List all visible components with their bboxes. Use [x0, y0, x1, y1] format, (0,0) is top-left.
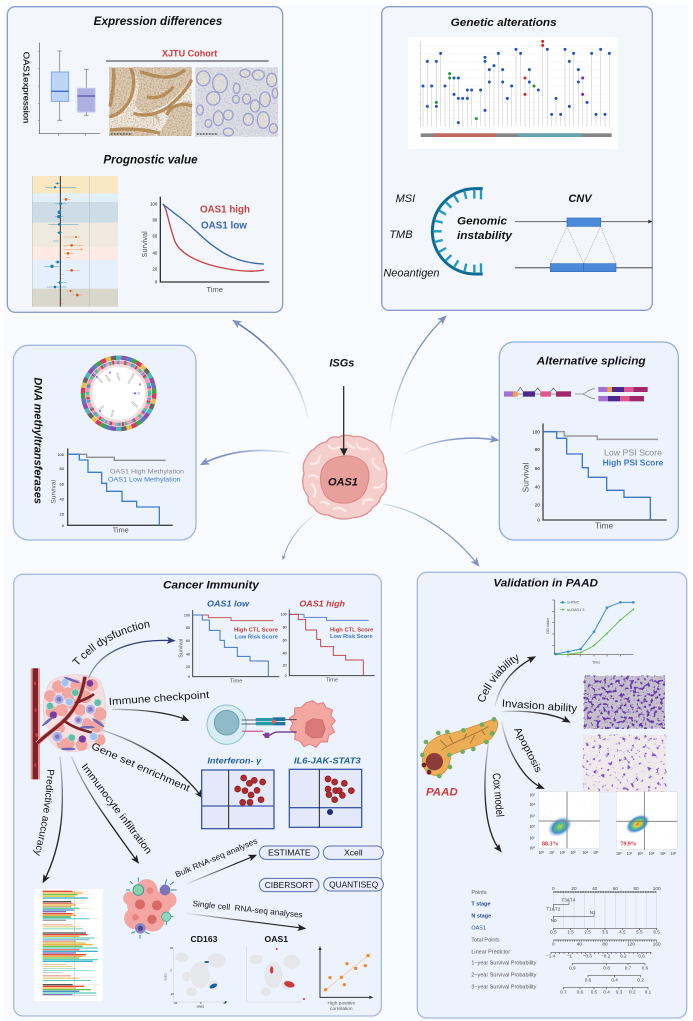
nomogram tick labels: 0.4 [611, 977, 618, 982]
heading: Genetic alterations: Genetic alterations [451, 17, 557, 29]
nomogram tick labels: −1.4 [546, 954, 556, 959]
flow cytometry: group 2: 10² [637, 851, 643, 856]
line chart: cell viability: Time [592, 661, 600, 665]
flow cytometry: group 1: 10⁵ [529, 793, 535, 798]
nomogram tick labels: 0.7 [625, 965, 632, 970]
flow cytometry: group 1: 10⁰ [529, 845, 535, 850]
central OAS1 cell [303, 357, 387, 519]
survival chart: PSI score: 80 [535, 447, 540, 452]
flow cytometry: group 1: 10³ [529, 813, 535, 818]
tSNE plot: CD163: tSNE1 [197, 1005, 205, 1009]
nomogram [471, 886, 661, 994]
method pills [259, 846, 383, 892]
arrow and label: Predictive accuracy [33, 756, 63, 884]
arrow and label: Cox model: Cox model [490, 773, 505, 817]
survival chart: methylation: OAS1 Low Methylation [108, 477, 181, 484]
nomogram row labels: T stage [471, 902, 491, 908]
labels: MSI, TMB, Neoantigen [383, 193, 440, 280]
survival chart: PSI score [521, 423, 667, 530]
flow cytometry: group 2 [616, 792, 677, 856]
survival chart: OAS1 low: 20 [186, 665, 190, 669]
label: Genomic instability: Genomic [457, 216, 507, 228]
survival chart: OAS1 low: Low Risk Score [235, 635, 278, 641]
nomogram tick labels: 120 [627, 942, 635, 947]
survival chart: OAS1 high vs low: Survival [140, 231, 149, 257]
label: Genomic instability: instability [457, 230, 513, 242]
arrow and label: Cell viability [478, 654, 536, 706]
image: transwell invasion, knockdown [583, 735, 666, 793]
survival chart: OAS1 high: 80 [283, 625, 287, 629]
nomogram row labels: Linear Predictor [471, 949, 510, 955]
nomogram tick labels: 4.5 [619, 930, 626, 935]
survival chart: OAS1 high vs low: OAS1 high [200, 205, 250, 216]
nomogram tick labels: 0.6 [585, 977, 592, 982]
arrow: OAS1 to genetic alterations [390, 317, 445, 432]
panel: cancer immunity [13, 574, 384, 1017]
tSNE plot: CD163: 0 [200, 1001, 202, 1005]
survival chart: OAS1 low [179, 598, 279, 685]
flow cytometry: group 1: 10¹ [529, 835, 535, 840]
tSNE plot: CD163: 0 [170, 969, 172, 973]
survival chart: OAS1 high vs low: 0 [155, 280, 158, 285]
survival chart: OAS1 low: 80 [186, 626, 190, 630]
arrow and label: Gene set enrichment: Gene set enrichment [89, 741, 192, 795]
line chart: cell viability: OD Value [546, 618, 550, 634]
image: IHC low staining [195, 67, 278, 137]
method pills: Xcell [344, 848, 363, 858]
survival chart: PSI score: 100 [532, 429, 540, 434]
flow cytometry: group 2: 10⁴ [660, 851, 666, 856]
illustration: tumor with blood vessel [31, 668, 106, 779]
arrow and label: Apoptosis: Apoptosis [511, 726, 544, 775]
arrow and label: Gene set enrichment [89, 729, 202, 797]
arrow: OAS1 to expression panel [234, 321, 308, 418]
survival chart: methylation: 60 [60, 481, 65, 486]
tSNE plot: OAS1: OAS1 [265, 934, 288, 944]
illustration: pancreas [420, 717, 498, 778]
arrow and label: Immunocyte infiltration [72, 757, 154, 862]
arrow and label: Immune checkpoint: Immune checkpoint [108, 690, 210, 708]
arrow and label: Cell viability: Cell viability [478, 654, 518, 702]
survival chart: OAS1 high: Low Risk Score [330, 634, 373, 640]
nomogram tick labels: 1.5 [567, 930, 574, 935]
nomogram row labels: N stage [471, 914, 491, 920]
survival chart: PSI score: High PSI Score [603, 458, 664, 468]
flow cytometry: group 1: 10⁴ [582, 850, 588, 855]
nomogram tick labels: 0.6 [638, 954, 645, 959]
flow cytometry: group 2: 10⁰ [616, 851, 622, 856]
label: XJTU Cohort: XJTU Cohort [162, 48, 217, 58]
nomogram tick labels: 6.5 [653, 930, 660, 935]
icon: genomic instability DNA arc [432, 189, 483, 274]
survival chart: OAS1 high vs low: Time [206, 285, 223, 294]
tSNE plot: CD163: 20 [170, 946, 173, 950]
nomogram row labels: OAS1 [471, 926, 486, 932]
survival chart: methylation: 40 [60, 497, 65, 502]
nomogram tick labels: 0.6 [642, 965, 649, 970]
heading: Alternative splicing: Alternative splicing [536, 356, 646, 368]
illustration: immune checkpoint interaction [207, 701, 335, 747]
survival chart: OAS1 high: 20 [283, 664, 287, 668]
survival chart: OAS1 low: 60 [186, 639, 190, 643]
tSNE plot: CD163: -20 [173, 1001, 178, 1005]
line chart: cell viability: si-RNC [567, 601, 580, 605]
flow cytometry: group 1: 10⁰ [538, 850, 544, 855]
image: transwell invasion, control [584, 676, 665, 729]
survival chart: methylation [50, 448, 184, 535]
tSNE plot: CD163: tSNE2 [164, 973, 168, 981]
nomogram tick labels: 0 [552, 886, 555, 891]
survival chart: methylation: 80 [60, 466, 65, 471]
flow cytometry: group 2: 79.9% [620, 842, 637, 848]
diagram: splicing transcripts [504, 387, 648, 401]
nomogram tick labels: 0.2 [637, 977, 644, 982]
panel: validation in PAAD [416, 572, 688, 1019]
nomogram tick labels: 80 [602, 942, 608, 947]
survival chart: PSI score: Low PSI Score [604, 448, 662, 458]
heading: Cancer Immunity: Cancer Immunity [163, 580, 260, 592]
flow cytometry: group 2: 10³ [649, 851, 655, 856]
survival chart: methylation: 100 [57, 452, 65, 457]
survival chart: OAS1 high: 60 [283, 638, 287, 642]
survival chart: OAS1 high: Time [326, 678, 338, 684]
arrow and label: Immune checkpoint [108, 690, 210, 720]
line chart: cell viability [546, 600, 635, 665]
arrow and label: Bulk RNA-seq analyses: Bulk RNA-seq analyses [174, 836, 259, 879]
survival chart: PSI score: 60 [535, 466, 540, 471]
survival chart: OAS1 high: OAS1 high [299, 598, 345, 608]
flow cytometry: group 1: 10¹ [549, 850, 555, 855]
survival chart: OAS1 low: Survival [179, 639, 185, 658]
survival chart: OAS1 high vs low: 100 [150, 202, 158, 207]
arrow and label: Single cell RNA-seq analyses: Single cell RNA-seq analyses [192, 899, 303, 920]
survival chart: OAS1 low: 40 [186, 652, 190, 656]
nomogram tick labels: 20 [571, 886, 577, 891]
nomogram tick labels: 5.5 [636, 930, 643, 935]
arrow and label: Cox model [485, 737, 505, 851]
arrow and label: Immunocyte infiltration: Immunocyte infiltration [79, 762, 154, 856]
nomogram tick labels: 2.5 [584, 930, 591, 935]
arrow: OAS1 to PAAD validation [383, 504, 478, 565]
enrichment plot: IL6-JAK-STAT3: IL6-JAK-STAT3 [294, 755, 361, 765]
panel: DNA methyltransferases [13, 345, 196, 540]
tSNE plot: CD163: -20 [170, 992, 174, 996]
arrow and label: Invasion ability: Invasion ability [501, 698, 578, 715]
arrow and label: Single cell RNA-seq analyses [186, 899, 304, 928]
tSNE plot: OAS1 [247, 934, 305, 1002]
nomogram tick labels: 100 [653, 886, 661, 891]
survival chart: OAS1 low: Time [230, 679, 242, 685]
scatter plot: correlation [318, 946, 373, 1012]
labels: MSI, TMB, Neoantigen: MSI [396, 193, 415, 205]
nomogram tick labels: T1&T2 [546, 906, 561, 911]
nomogram tick labels: 0.9 [569, 965, 576, 970]
survival chart: OAS1 high vs low: OAS1 low [201, 221, 247, 232]
flow cytometry: group 1: 10⁵ [593, 850, 599, 855]
lollipop mutation chart [408, 37, 618, 149]
nomogram tick labels: −0.2 [601, 954, 611, 959]
survival chart: PSI score: Survival [521, 463, 531, 492]
heading: DNA methyltransferases: DNA methyltransferases [31, 377, 43, 504]
nomogram tick labels: 80 [633, 886, 639, 891]
survival chart: OAS1 high vs low: 80 [153, 217, 158, 222]
nomogram row labels: Points [471, 890, 487, 896]
survival chart: OAS1 high vs low: 60 [153, 234, 158, 239]
nomogram tick labels: 0.5 [550, 930, 557, 935]
flow cytometry: group 2: 10¹ [627, 851, 633, 856]
flow cytometry: group 1: 88.3% [542, 841, 558, 847]
tSNE plot: CD163 [164, 934, 230, 1009]
diagram: copy number variation [515, 218, 652, 272]
arrow: ISGs to OAS1 [340, 386, 348, 456]
label: CNV: CNV [568, 193, 593, 205]
label: ISGs: ISGs [329, 357, 354, 369]
nomogram tick labels: 0 [552, 942, 555, 947]
survival chart: OAS1 low: High CTL Score [234, 627, 278, 633]
arrow and label: T cell dysfunction [72, 622, 176, 679]
heading: Expression differences: Expression differences [94, 14, 223, 28]
enrichment plot: IL6-JAK-STAT3 [289, 755, 362, 827]
panel: alternative splicing [499, 342, 678, 540]
survival chart: OAS1 high: 40 [283, 652, 287, 656]
survival chart: PSI score: 40 [535, 485, 540, 490]
flow cytometry: group 1: 10² [529, 824, 535, 829]
nomogram tick labels: 0.3 [616, 989, 623, 994]
flow cytometry: group 1 [529, 792, 600, 855]
arrow: OAS1 to DNA methyltransferases [202, 451, 290, 464]
survival chart: OAS1 high: 100 [281, 613, 287, 617]
nomogram tick labels: −0.6 [583, 954, 592, 959]
survival chart: OAS1 high vs low [140, 197, 269, 294]
arrow: OAS1 to alternative splicing [403, 438, 497, 455]
label: PAAD: PAAD [426, 787, 458, 799]
illustration: immune-infiltrated tumor [123, 877, 177, 939]
survival chart: PSI score: 20 [535, 503, 540, 508]
nomogram tick labels: 0.2 [629, 989, 636, 994]
forest plot [32, 176, 118, 307]
nomogram row labels: 2−year Survival Probability [471, 973, 537, 979]
tSNE plot: CD163: CD163 [191, 934, 218, 944]
nomogram axes [551, 892, 657, 989]
method pills: ESTIMATE [268, 848, 311, 858]
survival chart: OAS1 low: 100 [184, 613, 190, 617]
image: IHC high staining [109, 67, 192, 136]
nomogram row labels [471, 890, 537, 991]
nomogram tick labels: T3&T4 [561, 898, 576, 903]
method pills: CIBERSORT [265, 880, 313, 890]
nomogram tick labels: 0.8 [603, 965, 610, 970]
nomogram tick labels: 0.1 [645, 989, 652, 994]
arrow and label: T cell dysfunction: T cell dysfunction [72, 622, 150, 664]
nomogram tick labels: 40 [577, 942, 582, 947]
nomogram tick labels: 60 [613, 886, 618, 891]
nomogram tick labels: N1 [590, 910, 596, 915]
label: OAS1: OAS1 [328, 477, 358, 489]
survival chart: OAS1 high: High CTL Score [330, 627, 373, 633]
method pills: QUANTISEQ [329, 879, 379, 889]
label: Genomic instability [457, 216, 513, 242]
heading: Validation in PAAD: Validation in PAAD [493, 578, 598, 590]
survival chart: PSI score: 0 [537, 518, 540, 523]
nomogram tick labels: 0.6 [577, 989, 584, 994]
survival chart: OAS1 high: 0 [285, 674, 287, 678]
survival chart: methylation: Survival [50, 479, 57, 504]
survival chart: OAS1 high [281, 598, 375, 684]
icon: tumor cell [303, 435, 387, 519]
nomogram tick labels [546, 886, 661, 994]
nomogram tick labels: 0.2 [620, 954, 627, 959]
flow cytometry: group 2: 10⁵ [671, 851, 677, 856]
survival chart: methylation: Time [113, 526, 129, 535]
nomogram tick labels: 0.7 [560, 989, 567, 994]
scatter plot: correlation: correlation [330, 1006, 353, 1012]
nomogram tick labels: 3.5 [602, 930, 609, 935]
arrow: OAS1 to cancer immunity [283, 513, 317, 559]
nomogram row labels: 3−year Survival Probability [471, 985, 537, 991]
survival chart: methylation: 0 [62, 523, 65, 528]
arrow and label: Invasion ability [501, 698, 578, 722]
line chart: cell viability: si-OAS1 3 [567, 608, 584, 612]
boxplot: OAS1 expression: OAS1expression [21, 52, 31, 124]
survival chart: OAS1 low: 0 [188, 675, 190, 679]
nomogram row labels: 1−year Survival Probability [471, 961, 537, 967]
survival chart: OAS1 high vs low: 40 [153, 251, 158, 256]
nomogram tick labels: N0 [551, 918, 557, 923]
labels: MSI, TMB, Neoantigen: Neoantigen [383, 268, 440, 280]
nomogram tick labels: 0.5 [591, 989, 598, 994]
flow cytometry: group 1: 10⁴ [529, 802, 535, 807]
flow cytometry: group 1: 10² [560, 850, 566, 855]
nomogram tick labels: 0.4 [603, 989, 610, 994]
arrow and label: Apoptosis [502, 722, 544, 788]
scatter plot: correlation: High positive [328, 1001, 355, 1007]
boxplot: OAS1 expression [21, 43, 100, 136]
nomogram row labels: Total Points [471, 938, 500, 944]
enrichment plot: Interferon-γ [202, 756, 274, 829]
tSNE plot: CD163: 20 [223, 1001, 227, 1005]
bar chart: predictive accuracy [34, 889, 103, 1001]
nomogram tick labels: 160 [653, 942, 661, 947]
flow cytometry: group 1: 10³ [570, 850, 576, 855]
enrichment plot: Interferon-γ: Interferon- γ [207, 756, 263, 766]
panel: expression differences and prognostic value [7, 7, 283, 312]
nomogram tick labels: 40 [592, 886, 598, 891]
survival chart: methylation: 20 [60, 511, 65, 516]
panel: genetic alterations [382, 7, 652, 310]
nomogram tick labels: −1 [567, 954, 572, 959]
survival chart: OAS1 low: OAS1 low [207, 598, 250, 608]
circos plot [83, 358, 154, 429]
survival chart: methylation: OAS1 High Methylation [110, 469, 184, 476]
labels: MSI, TMB, Neoantigen: TMB [389, 229, 413, 241]
arrow and label: Predictive accuracy: Predictive accuracy [33, 770, 54, 856]
heading: Prognostic value: Prognostic value [103, 152, 198, 166]
survival chart: OAS1 high vs low: 20 [153, 266, 158, 271]
survival chart: PSI score: Time [595, 520, 614, 530]
